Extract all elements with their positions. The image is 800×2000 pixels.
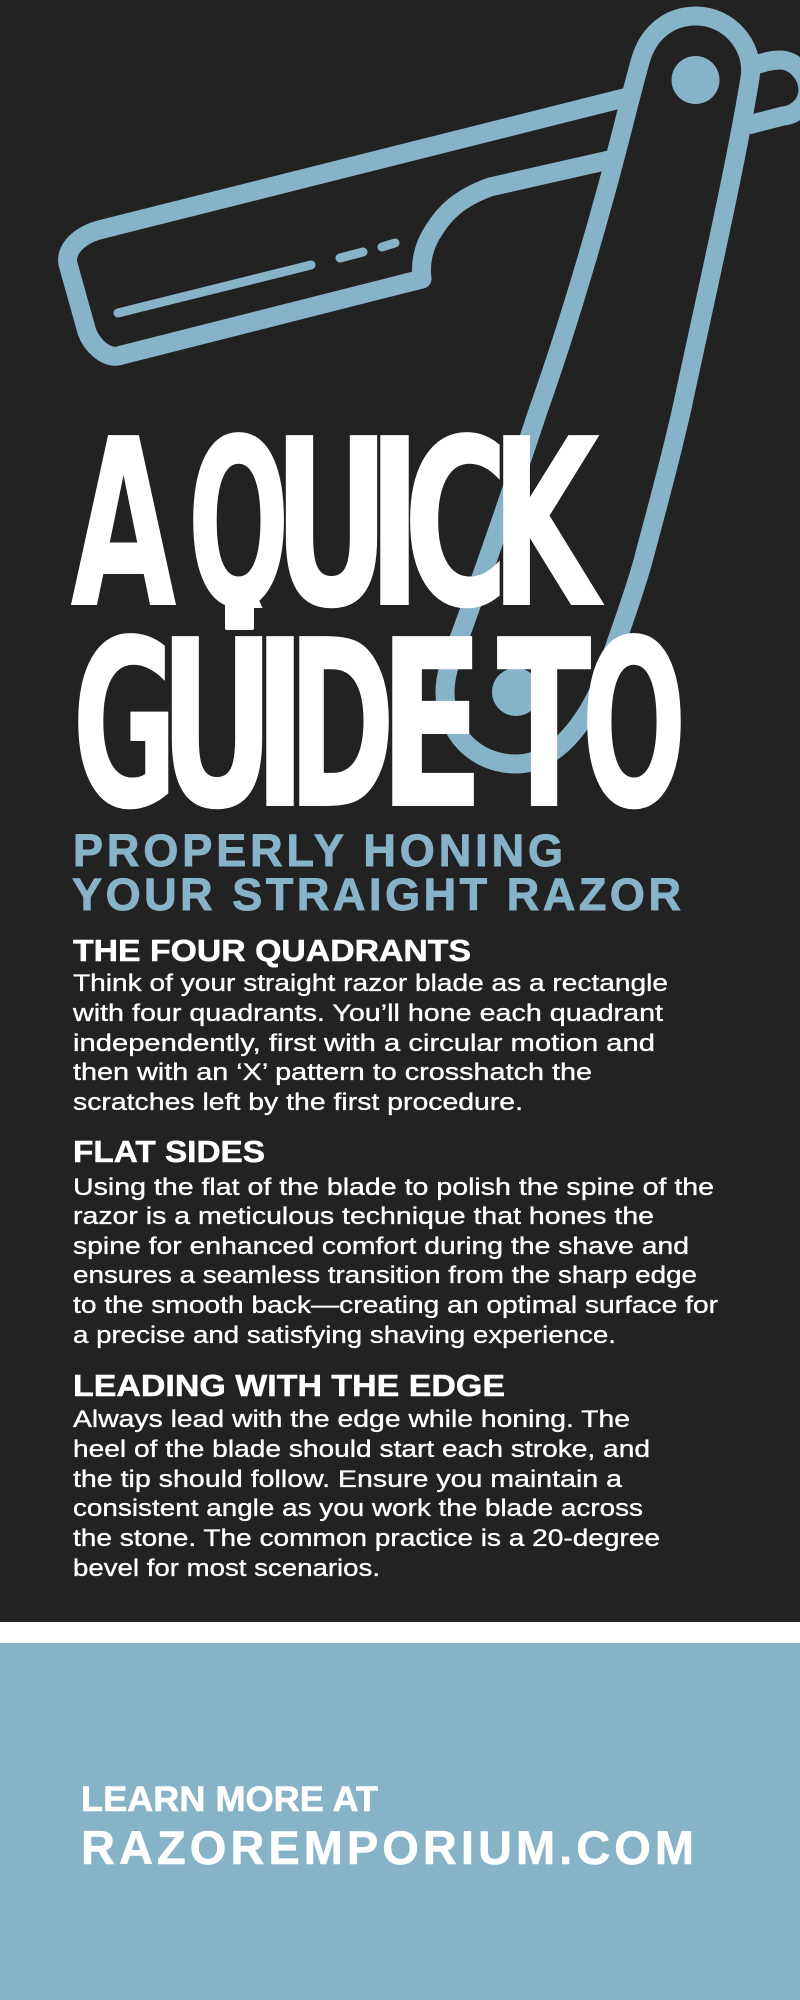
title: A Quick Guide To: E xyxy=(378,590,485,861)
section: leading with the edge xyxy=(73,1368,660,1582)
footer line: learn more at: LEARN MORE AT xyxy=(81,1780,378,1819)
title: A Quick Guide To: Q xyxy=(187,389,290,660)
title: A Quick Guide To xyxy=(71,432,681,810)
text block: the four quadrants body: independently, first with a circular motion and xyxy=(73,1030,655,1057)
subtitle: PROPERLY HONING xyxy=(73,825,563,876)
white divider band xyxy=(0,1622,800,1643)
title: A Quick Guide To: U xyxy=(272,389,390,660)
text block: flat sides body: Using the flat of the blade to polish the spine of the xyxy=(73,1174,714,1201)
text block: flat sides body: a precise and satisfying shaving experience. xyxy=(73,1322,616,1349)
text block: leading with the edge body: the stone. The common practice is a 20-degree xyxy=(73,1525,660,1552)
title: A Quick Guide To: I xyxy=(253,590,307,861)
text block: flat sides body: ensures a seamless transition from the sharp edge xyxy=(73,1262,697,1289)
title: A Quick Guide To: G xyxy=(72,590,178,861)
text block: leading with the edge body: consistent angle as you work the blade across xyxy=(73,1495,643,1522)
heading: leading with the edge: LEADING WITH THE EDGE xyxy=(73,1368,505,1403)
title: A Quick Guide To: I xyxy=(366,389,423,660)
heading: flat sides: FLAT SIDES xyxy=(73,1134,265,1169)
text block: flat sides body: to the smooth back—creating an optimal surface for xyxy=(73,1292,718,1319)
section: the four quadrants xyxy=(72,933,668,1116)
subtitle xyxy=(72,825,681,920)
text block: flat sides body: razor is a meticulous technique that hones the xyxy=(73,1203,654,1230)
footer line: website: RAZOREMPORIUM.COM xyxy=(81,1821,694,1874)
title: A Quick Guide To: A xyxy=(70,389,177,660)
section: flat sides xyxy=(73,1134,718,1349)
text block: flat sides body xyxy=(73,1174,718,1349)
text block: the four quadrants body: then with an ‘X’ pattern to crosshatch the xyxy=(73,1059,592,1086)
text block: leading with the edge body: the tip should follow. Ensure you maintain a xyxy=(73,1466,622,1493)
title: A Quick Guide To: O xyxy=(581,590,687,861)
text block: leading with the edge body: heel of the blade should start each stroke, and xyxy=(73,1436,650,1463)
text block: leading with the edge body: bevel for most scenarios. xyxy=(73,1555,380,1582)
text block: the four quadrants body xyxy=(72,970,668,1116)
panel: footer call to action xyxy=(0,1643,800,2000)
title: A Quick Guide To: D xyxy=(287,590,396,861)
text block: the four quadrants body: scratches left by the first procedure. xyxy=(73,1089,523,1116)
icon: straight razor xyxy=(68,16,800,764)
text block: the four quadrants body: with four quadrants. You’ll hone each quadrant xyxy=(72,1000,663,1027)
text block: flat sides body: spine for enhanced comfort during the shave and xyxy=(73,1233,689,1260)
text block: the four quadrants body: Think of your straight razor blade as a rectangle xyxy=(73,970,668,997)
text block: leading with the edge body xyxy=(73,1406,660,1582)
title: A Quick Guide To: C xyxy=(403,389,509,660)
title: A Quick Guide To: T xyxy=(496,590,592,861)
heading: the four quadrants: THE FOUR QUADRANTS xyxy=(73,933,471,968)
subtitle: YOUR STRAIGHT RAZOR xyxy=(72,869,681,920)
text block: leading with the edge body: Always lead with the edge while honing. The xyxy=(73,1406,630,1433)
title: A Quick Guide To: U xyxy=(159,590,275,861)
title: A Quick Guide To: K xyxy=(490,389,605,660)
